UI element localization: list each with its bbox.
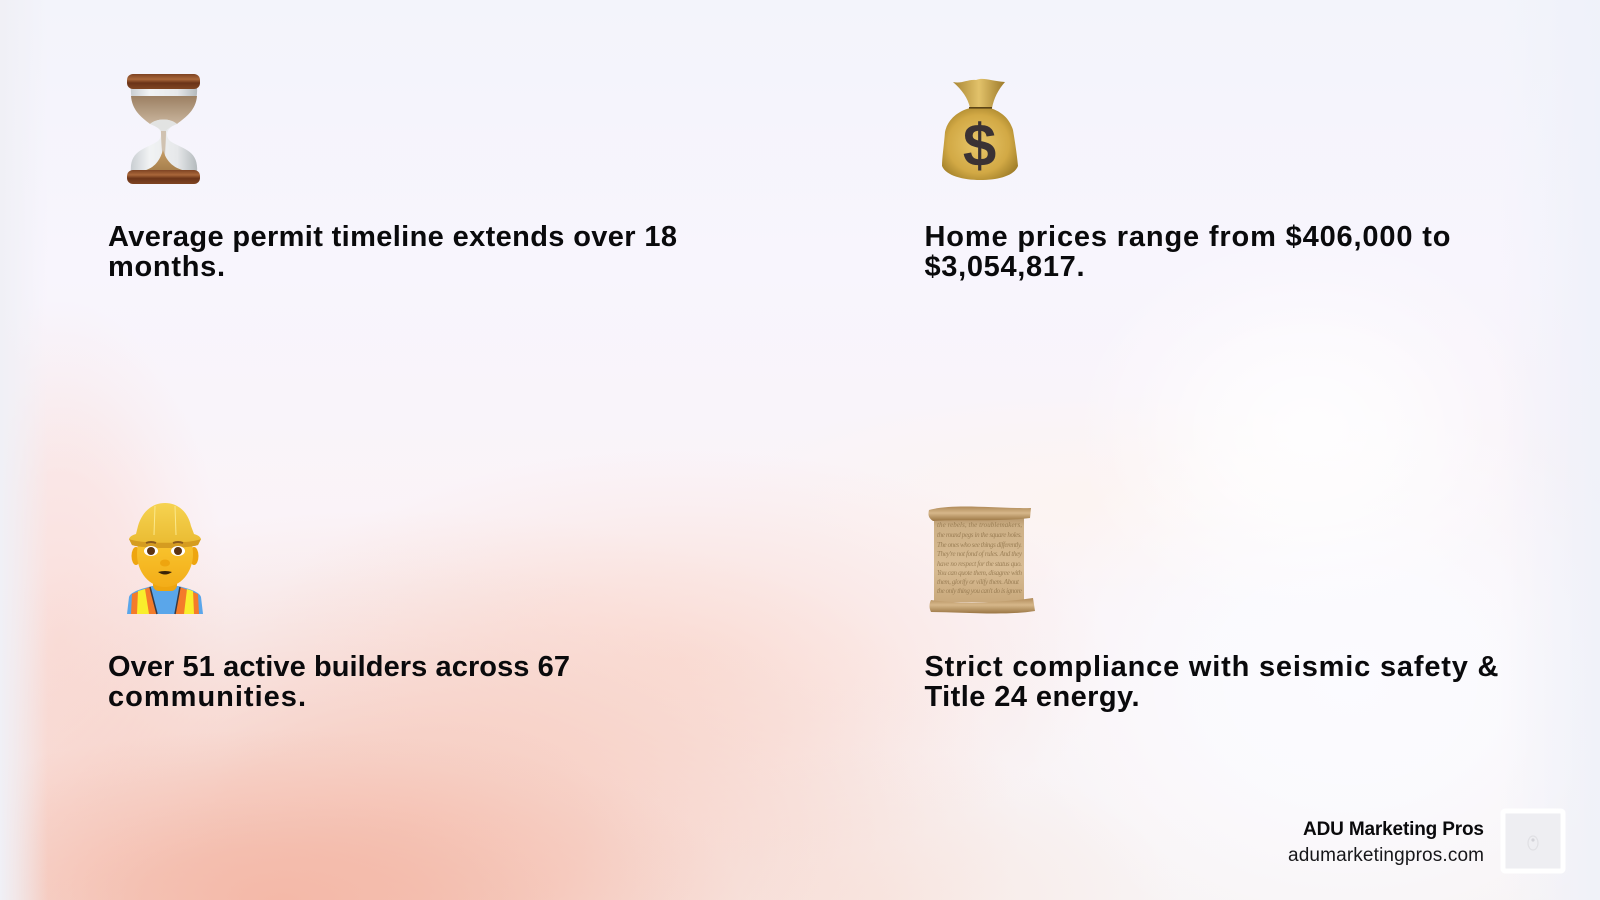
icon: scroll: the round pegs in the square holes. [937,531,1022,539]
footer brand: name and url: ADU Marketing Pros [1303,819,1484,840]
icon: construction worker [127,503,203,614]
panel: permit timeline [108,74,677,283]
icon: scroll: You can quote them, disagree with [937,569,1022,577]
icon: scroll: have no respect for the status quo. [937,560,1022,568]
panel: home prices [924,79,1450,283]
icon: scroll: them, glorify or vilify them. About [937,578,1020,586]
logo box [1503,811,1563,871]
text: compliance: Strict compliance with seismic safety & [924,651,1499,683]
text: active builders: communities. [108,681,306,713]
icon: scroll: The ones who see things differently. [937,541,1022,549]
text: home prices: $3,054,817. [924,251,1084,283]
text: active builders: Over 51 active builders across 67 [108,651,570,683]
panel: compliance [924,507,1499,713]
icon: scroll: the only thing you can't do is ignore [937,587,1022,595]
text: permit timeline: Average permit timeline extends over 18 [108,221,677,253]
footer brand: name and url: adumarketingpros.com [1288,845,1484,866]
icon: scroll: the rebels, the troublemakers, [937,521,1022,529]
text: home prices: Home prices range from $406,000 to [924,221,1450,253]
text: compliance: Title 24 energy. [924,681,1140,713]
icon: hourglass [127,74,200,184]
text: permit timeline: months. [108,251,225,283]
panel: active builders [108,503,570,713]
icon: scroll: They're not fond of rules. And they [937,550,1023,558]
icon: money bag: $ [963,112,996,179]
footer brand: name and url [1288,819,1484,866]
icon: scroll [928,507,1035,614]
icon: money bag [942,79,1018,180]
